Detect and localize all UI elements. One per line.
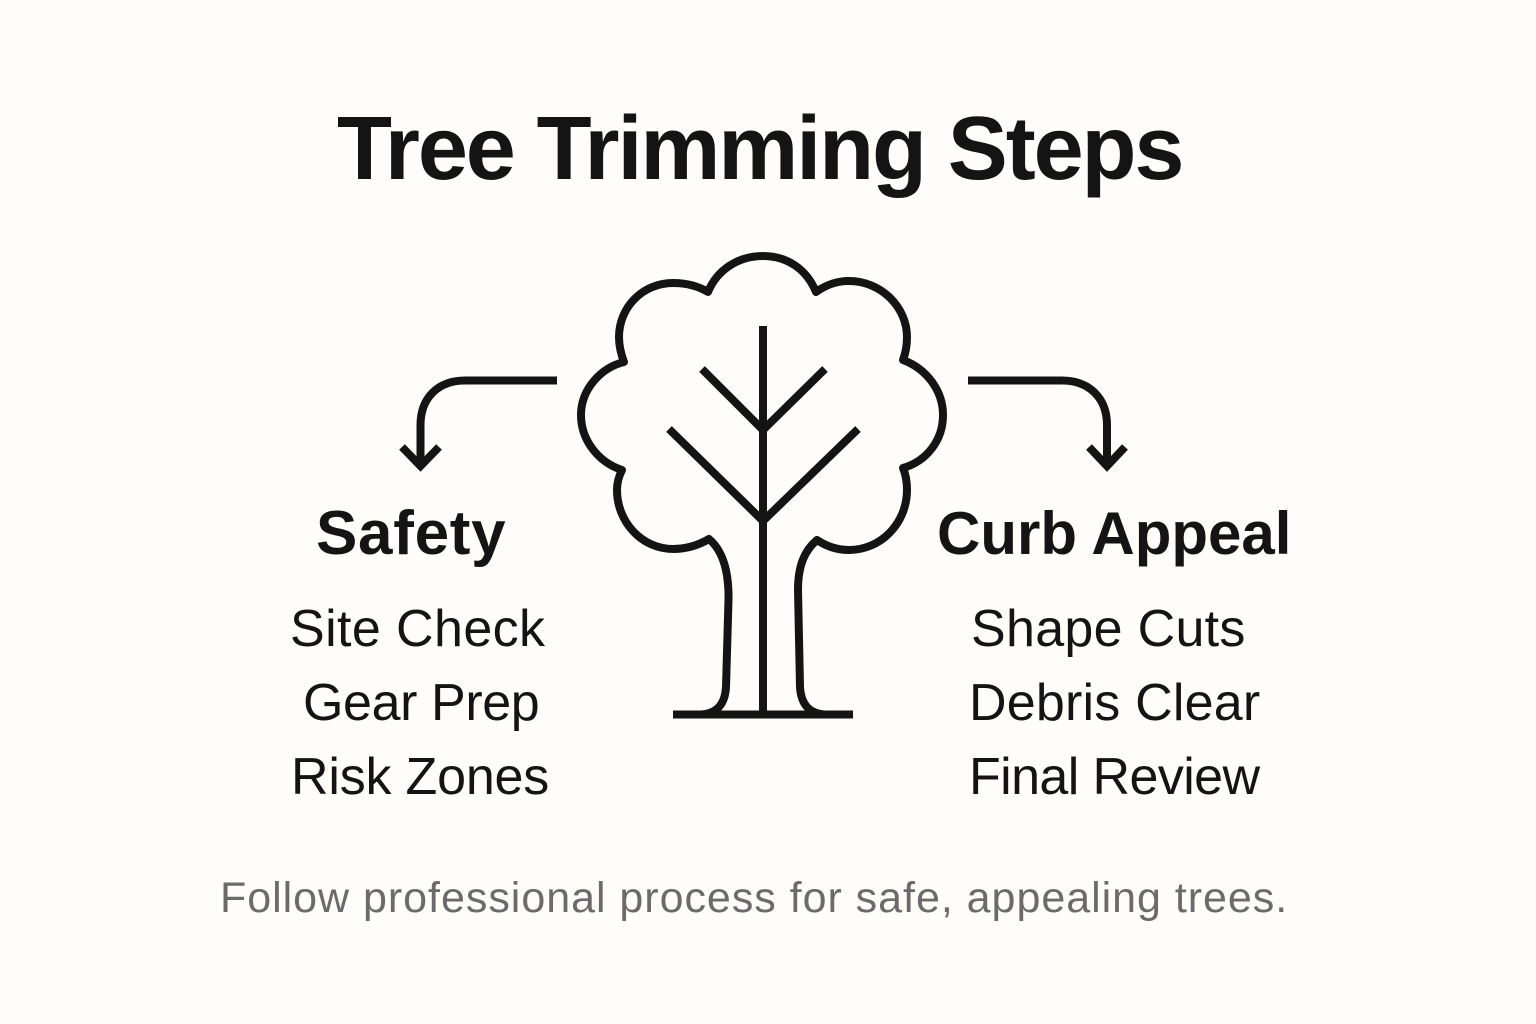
arrow: right to curb appeal (968, 380, 1125, 466)
text block: safety items: Risk Zones (291, 748, 549, 806)
canopy and trunk outline (581, 256, 943, 714)
text block: curb appeal items: Shape Cuts (971, 600, 1246, 658)
trunk centre line (759, 326, 767, 714)
text block: safety items (290, 600, 549, 806)
text block: safety items: Site Check (290, 600, 545, 658)
upper branches (702, 369, 825, 430)
footer caption: Follow professional process for safe, appealing trees. (220, 874, 1288, 922)
heading: safety: Safety (316, 499, 506, 568)
icon: tree (581, 256, 943, 714)
text block: safety items: Gear Prep (303, 674, 539, 732)
text block: curb appeal items (969, 600, 1260, 806)
text block: curb appeal items: Final Review (969, 748, 1259, 806)
heading: curb appeal: Curb Appeal (937, 500, 1291, 567)
ground line (673, 710, 853, 718)
lower branches (669, 429, 858, 521)
text block: curb appeal items: Debris Clear (969, 674, 1260, 732)
arrow: left to safety (402, 380, 557, 466)
title: Tree Trimming Steps (337, 99, 1182, 199)
